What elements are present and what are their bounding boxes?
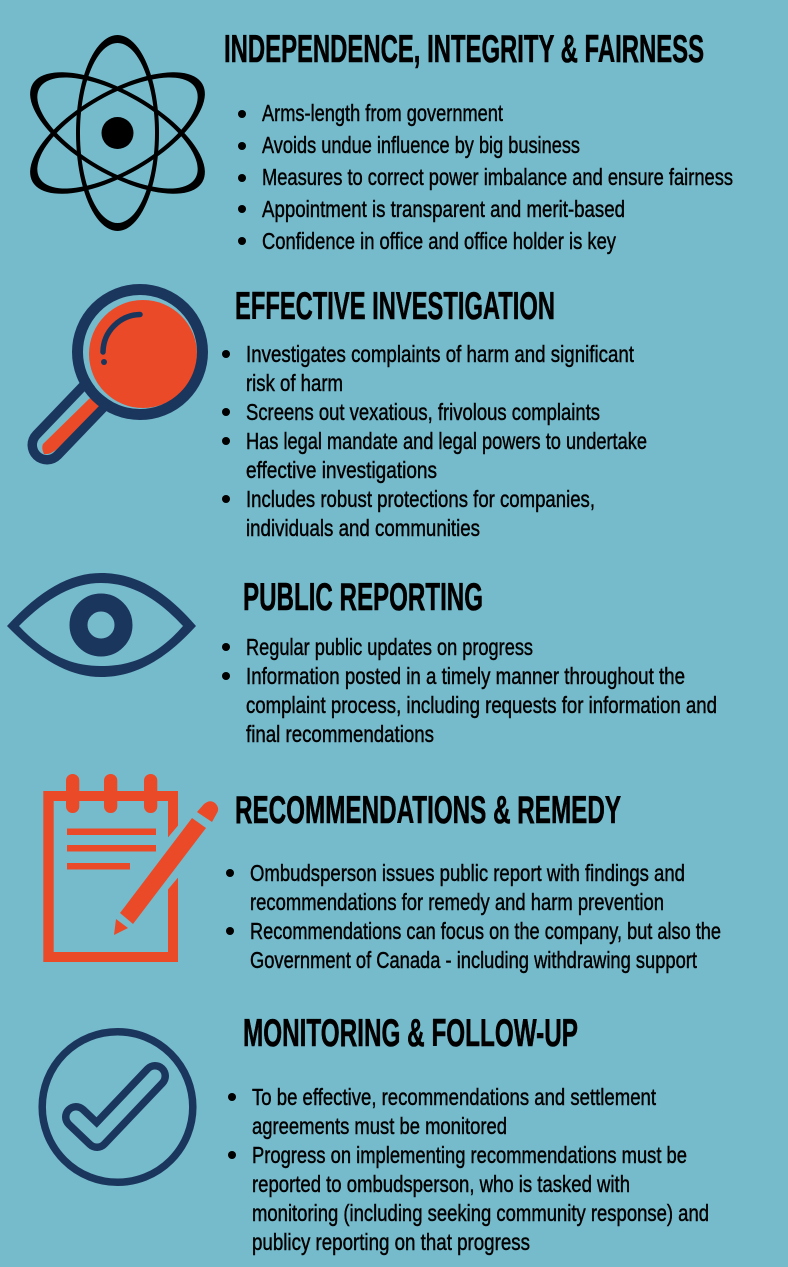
bullet list: recommendations for remedy and harm prevention: [250, 889, 664, 915]
bullet list: Appointment is transparent and merit-based: [262, 196, 625, 222]
bullet list: publicy reporting on that progress: [252, 1229, 530, 1255]
bullet list: To be effective, recommendations and settlement: [252, 1084, 656, 1110]
bullet list: reported to ombudsperson, who is tasked with: [252, 1171, 630, 1197]
panel: monitoring and follow-up: [42, 1012, 709, 1255]
bullet list: Ombudsperson issues public report with findings and: [250, 860, 685, 886]
icon: notepad and pencil: [43, 774, 218, 962]
bullet list: agreements must be monitored: [252, 1113, 507, 1139]
icon: magnifying glass: [42, 290, 203, 454]
bullet list: risk of harm: [246, 370, 343, 396]
bullet list: [222, 634, 717, 747]
bullet list: final recommendations: [246, 721, 434, 747]
bullet list: Has legal mandate and legal powers to undertake: [246, 428, 647, 454]
panel: independence, integrity and fairness: [12, 28, 733, 254]
bullet list: [226, 860, 721, 973]
bullet list: Investigates complaints of harm and significant: [246, 341, 634, 367]
bullet list: Confidence in office and office holder is key: [262, 228, 616, 254]
heading: MONITORING & FOLLOW-UP: [243, 1012, 578, 1055]
icon: eye: [7, 573, 196, 677]
bullet list: Arms-length from government: [262, 100, 503, 126]
heading: PUBLIC REPORTING: [243, 576, 483, 619]
panel: effective investigation: [42, 285, 647, 541]
panel: recommendations and remedy: [43, 774, 721, 973]
icon: atom: [12, 35, 223, 231]
bullet list: [222, 341, 647, 541]
bullet list: Includes robust protections for companies,: [246, 486, 595, 512]
bullet list: Regular public updates on progress: [246, 634, 533, 660]
bullet list: individuals and communities: [246, 515, 480, 541]
bullet list: effective investigations: [246, 457, 437, 483]
panel: public reporting: [7, 573, 717, 747]
icon: check mark in circle: [42, 1032, 193, 1182]
bullet list: [228, 1084, 709, 1255]
heading: EFFECTIVE INVESTIGATION: [235, 285, 555, 328]
bullet list: [238, 100, 733, 254]
bullet list: Information posted in a timely manner throughout the: [246, 663, 685, 689]
bullet list: Screens out vexatious, frivolous complaints: [246, 399, 600, 425]
bullet list: Avoids undue influence by big business: [262, 132, 580, 158]
